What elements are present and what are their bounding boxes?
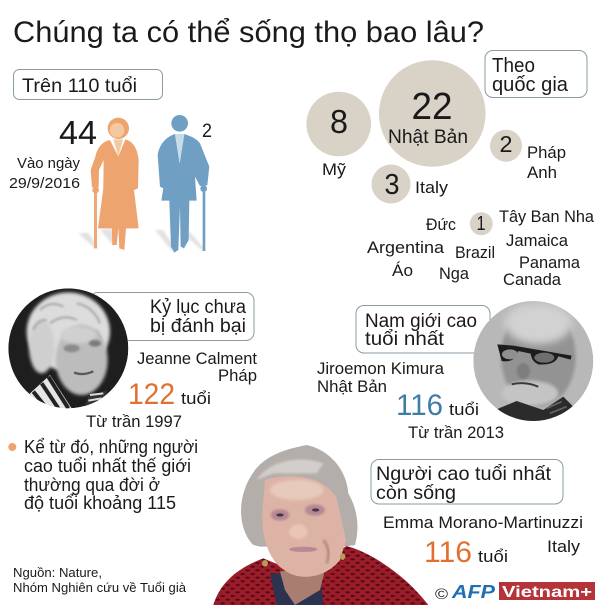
icon: elderly woman: [78, 118, 139, 250]
heading: unbroken record: Kỷ lục chưa: [150, 297, 246, 318]
logo: AFP and Vietnam+: ©: [435, 586, 448, 603]
name: Jeanne Calment: [137, 349, 257, 385]
panel: unbroken record: [8, 288, 257, 513]
date note: 29/9/2016: [9, 175, 80, 192]
bubble: one each: Áo: [392, 261, 413, 280]
bubble: one each: Jamaica: [506, 231, 569, 250]
bullet note: [8, 437, 198, 513]
bubble: Japan: Nhật Bản: [388, 127, 468, 148]
name: Emma Morano-Martinuzzi: Italy: [547, 537, 581, 556]
panel: by country: [306, 50, 595, 289]
icon: elderly man: [155, 115, 209, 253]
bubble: one each: Đức: [426, 215, 456, 234]
bubble: Italy: 3: [384, 169, 400, 201]
logo: AFP and Vietnam+: [435, 582, 595, 603]
age: 116 woman: 116: [424, 536, 472, 569]
logo: AFP and Vietnam+: Vietnam+: [502, 584, 592, 601]
heading: oldest living: còn sống: [376, 482, 456, 504]
bubble: one each: Brazil: [455, 243, 495, 262]
name: Jeanne Calment: Pháp: [218, 366, 257, 385]
age: 122: tuổi: [181, 389, 211, 408]
bubble: one each: Canada: [503, 270, 562, 289]
date note: Vào ngày: [17, 155, 80, 172]
bubble: one each: [367, 207, 595, 289]
age: 122: 122: [128, 378, 175, 411]
bullet note: Kể từ đó, những người: [24, 437, 198, 457]
name: Jiroemon Kimura: Jiroemon Kimura: [317, 359, 445, 378]
photo: Jiroemon Kimura: [473, 301, 593, 423]
name: Emma Morano-Martinuzzi: Emma Morano-Martinuzzi: [383, 513, 583, 532]
title: Chúng ta có thể sống thọ bao lâu?: [13, 16, 484, 49]
bullet note: độ tuổi khoảng 115: [24, 493, 176, 513]
panel: oldest living person: [213, 445, 583, 605]
death year: 1997: Từ trần 1997: [86, 412, 182, 431]
heading: by country: quốc gia: [492, 74, 569, 96]
age: 116 man: tuổi: [449, 400, 479, 419]
heading: oldest living: Người cao tuổi nhất: [376, 463, 552, 485]
heading: over 110: Trên 110 tuổi: [22, 76, 137, 97]
age: 122: [128, 378, 211, 411]
bubble: France, UK: Pháp: [527, 143, 566, 162]
death year: 2013: Từ trần 2013: [408, 423, 504, 442]
bubble: one each: Nga: [439, 264, 470, 283]
bubble: Italy: Italy: [415, 178, 449, 197]
bubble: Japan: [379, 60, 486, 167]
date note: [9, 155, 80, 192]
age: 116 man: [396, 389, 479, 422]
age: 116 woman: tuổi: [478, 547, 508, 566]
photo: Emma Morano-Martinuzzi: [213, 445, 428, 605]
bubble: USA: 8: [330, 103, 348, 140]
bullet note: thường qua đời ở: [24, 475, 160, 495]
heading: over 110: [14, 70, 162, 100]
heading: oldest man: Nam giới cao: [365, 311, 477, 332]
heading: unbroken record: bị đánh bại: [150, 316, 246, 337]
bubble: USA: [306, 92, 371, 179]
name: Emma Morano-Martinuzzi: [383, 513, 583, 556]
source: Nhóm Nghiên cứu về Tuổi già: [13, 580, 187, 595]
bubble: USA: Mỹ: [322, 160, 347, 179]
heading: by country: Theo: [492, 55, 535, 77]
heading: oldest living: [371, 460, 563, 504]
panel: oldest man: [317, 301, 593, 442]
name: Jiroemon Kimura: [317, 359, 445, 396]
age: 116 man: 116: [396, 389, 443, 422]
name: Jeanne Calment: Jeanne Calment: [137, 349, 257, 368]
bubble: France, UK: [490, 130, 566, 182]
heading: by country: [485, 50, 587, 98]
name: Jiroemon Kimura: Nhật Bản: [317, 377, 387, 396]
bubble: Japan: 22: [412, 86, 452, 128]
photo: Jeanne Calment: [8, 288, 128, 408]
age: 116 woman: [424, 536, 508, 569]
logo: AFP and Vietnam+: AFP: [451, 582, 496, 602]
bubble: one each: Panama: [519, 253, 581, 272]
heading: unbroken record: [90, 292, 254, 340]
source: Nguồn: Nature,: [13, 565, 102, 580]
panel: over 110 years old: [9, 70, 212, 253]
heading: oldest man: [356, 306, 490, 353]
bubble: one each: Tây Ban Nha: [499, 207, 595, 226]
bubble: France, UK: Anh: [527, 163, 557, 182]
heading: oldest man: tuổi nhất: [365, 329, 445, 350]
bubble: one each: 1: [476, 213, 486, 235]
number: men: 2: [202, 121, 212, 142]
bullet note: cao tuổi nhất thế giới: [24, 456, 191, 476]
bubble: France, UK: 2: [500, 131, 512, 157]
bubble: Italy: [372, 164, 449, 204]
bubble: one each: Argentina: [367, 238, 445, 257]
source: [13, 565, 187, 595]
number: women: 44: [59, 114, 97, 151]
